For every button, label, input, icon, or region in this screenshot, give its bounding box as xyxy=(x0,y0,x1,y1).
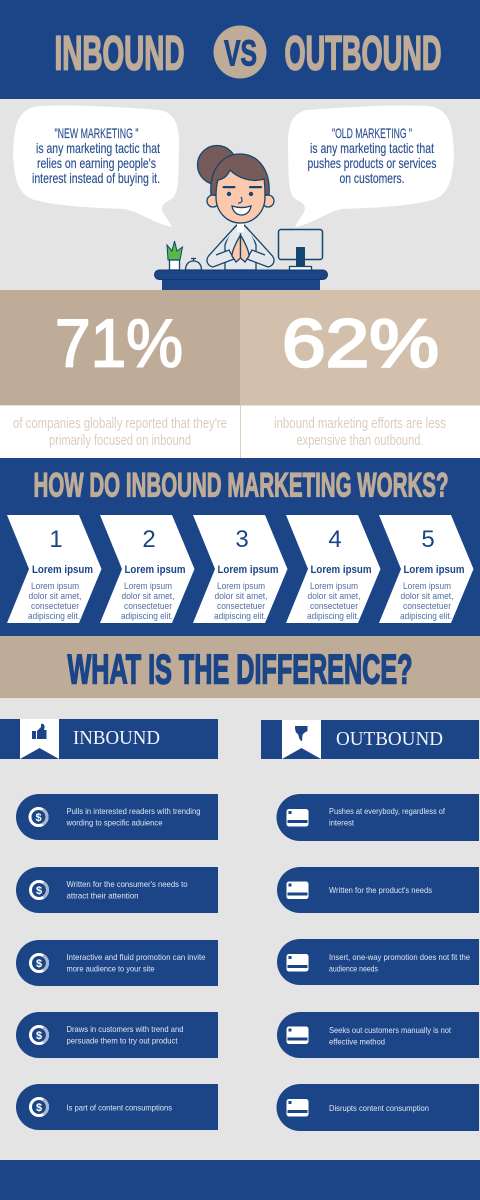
stat caption: 62%: expensive than outbound. xyxy=(296,433,424,449)
outbound row 2 xyxy=(277,867,479,913)
eyes and brows xyxy=(222,186,262,196)
inbound row 2: Written for the consumer's needs to xyxy=(66,879,188,889)
icon: coin xyxy=(30,882,48,898)
outbound row 1 xyxy=(276,794,479,841)
step 5 xyxy=(379,515,474,623)
speech bubble: old marketing: on customers. xyxy=(340,170,404,186)
icon: coin xyxy=(30,808,47,826)
step 2: adipiscing elit. xyxy=(121,611,173,621)
outbound row 4 xyxy=(277,1012,479,1058)
column header: inbound xyxy=(0,719,218,759)
inbound row 2 xyxy=(16,867,218,913)
inbound row 4 xyxy=(16,1012,218,1058)
stat caption: 71%: primarily focused on inbound xyxy=(49,433,191,449)
outbound row 4: effective method xyxy=(329,1036,385,1046)
step 3 xyxy=(193,515,288,623)
stat caption: 62% xyxy=(241,406,480,458)
step 3: consectetuer xyxy=(217,601,265,611)
outbound row 3 xyxy=(277,939,479,985)
step 5: 5 xyxy=(421,526,435,553)
step 2: consectetuer xyxy=(124,601,172,611)
torso xyxy=(225,225,256,270)
vs badge xyxy=(214,26,266,78)
step 4: Lorem ipsum xyxy=(310,564,372,576)
stat panel: 71% xyxy=(0,290,240,405)
inbound row 1: Pulls in interested readers with trending xyxy=(66,806,201,816)
step 3: 3 xyxy=(235,526,249,553)
stat panel: 62%: 62% xyxy=(282,306,439,382)
stat panel: 71%: 71% xyxy=(55,306,183,382)
step 2: Lorem ipsum xyxy=(124,564,186,576)
inbound row 3 xyxy=(16,940,218,986)
inbound row 3: more audience to your site xyxy=(66,964,155,974)
step 1: Lorem ipsum xyxy=(32,564,93,576)
inbound row 5: Is part of content consumptions xyxy=(66,1102,172,1112)
arms and hands xyxy=(207,224,274,267)
outbound row 5: Disrupts content consumption xyxy=(329,1103,429,1113)
ears xyxy=(207,195,274,207)
inbound row 1 xyxy=(16,794,218,840)
illustration: woman at desk xyxy=(154,146,328,290)
nose xyxy=(238,197,242,203)
section heading: what is the difference xyxy=(0,636,480,698)
desk xyxy=(154,270,328,290)
step 3: dolor sit amet, xyxy=(214,591,268,601)
speech bubble: new marketing: interest instead of buying it. xyxy=(32,170,160,186)
service bell xyxy=(186,258,202,270)
icon: coin: $ xyxy=(36,885,42,897)
step 1: adipiscing elit. xyxy=(28,611,80,621)
stat panel: 62% xyxy=(240,290,480,405)
step 4 xyxy=(286,515,380,623)
step 3: Lorem ipsum xyxy=(218,564,279,576)
icon: coin: $ xyxy=(36,1030,42,1042)
plant xyxy=(167,241,182,270)
icon: coin xyxy=(30,954,48,972)
face xyxy=(216,170,265,223)
step 5: Lorem ipsum xyxy=(404,564,465,576)
icon: card xyxy=(286,809,308,826)
inbound row 2: attract their attention xyxy=(66,890,139,900)
step 5: dolor sit amet, xyxy=(400,591,454,601)
icon: coin xyxy=(30,1098,48,1116)
step 4: consectetuer xyxy=(310,601,358,611)
hair back xyxy=(211,154,269,195)
computer monitor xyxy=(278,230,322,270)
footer band xyxy=(0,1160,480,1200)
column header: outbound: OUTBOUND xyxy=(336,728,443,750)
step 5: Lorem ipsum xyxy=(403,581,451,591)
column header: outbound xyxy=(261,720,479,759)
inbound row 1: wording to specific aduience xyxy=(66,818,163,828)
step 5: consectetuer xyxy=(403,601,451,611)
step 5: adipiscing elit. xyxy=(400,611,452,621)
step 4: 4 xyxy=(328,526,342,553)
inbound row 5 xyxy=(16,1084,218,1130)
speech bubble: new marketing: "NEW MARKETING " xyxy=(54,125,139,141)
step 1 xyxy=(7,515,102,623)
step 1: Lorem ipsum xyxy=(31,581,79,591)
speech bubble: new marketing: relies on earning people's xyxy=(37,155,156,171)
icon: card xyxy=(286,882,308,899)
icon: thumbs up xyxy=(32,724,46,739)
icon: coin: $ xyxy=(36,958,42,970)
header banner xyxy=(0,0,480,99)
step 3: Lorem ipsum xyxy=(217,581,265,591)
step 1: dolor sit amet, xyxy=(28,591,82,601)
hair bun xyxy=(198,146,236,184)
step 2: dolor sit amet, xyxy=(122,591,174,601)
step 1: consectetuer xyxy=(31,601,79,611)
column header: inbound: INBOUND xyxy=(73,727,160,749)
outbound row 2: Written for the product's needs xyxy=(329,885,432,895)
outbound row 4: Seeks out customers manually is not xyxy=(329,1025,452,1035)
vs badge: VS xyxy=(224,32,257,74)
icon: coin: $ xyxy=(36,1102,42,1114)
step 4: adipiscing elit. xyxy=(307,611,359,621)
stat caption: 71%: of companies globally reported that they're xyxy=(13,416,227,432)
inbound row 4: persuade them to try out product xyxy=(66,1036,178,1046)
icon: card xyxy=(286,1099,308,1116)
icon: card xyxy=(286,954,308,972)
smile xyxy=(232,206,251,215)
icon: thumbs down xyxy=(295,726,308,741)
step 4: dolor sit amet, xyxy=(308,591,360,601)
outbound row 1: Pushes at everybody, regardless of xyxy=(329,806,446,816)
section: how inbound marketing works xyxy=(0,458,480,636)
outbound row 5 xyxy=(276,1084,479,1131)
step 3: adipiscing elit. xyxy=(214,611,266,621)
speech bubble: old marketing xyxy=(288,105,454,227)
outbound row 3: audience needs xyxy=(329,964,378,974)
stat caption: 71% xyxy=(0,406,240,458)
step 4: Lorem ipsum xyxy=(310,581,358,591)
inbound row 3: Interactive and fluid promotion can invite xyxy=(66,952,206,962)
speech bubble: new marketing: is any marketing tactic that xyxy=(36,140,160,156)
icon: coin xyxy=(30,1026,48,1044)
icon: coin: $ xyxy=(35,812,42,824)
icon: card xyxy=(286,1026,308,1044)
title: inbound: INBOUND xyxy=(54,28,184,80)
step 2 xyxy=(100,515,194,623)
speech bubble: old marketing: "OLD MARKETING " xyxy=(332,125,412,141)
inbound row 4: Draws in customers with trend and xyxy=(66,1024,184,1034)
speech bubble: old marketing: pushes products or services xyxy=(308,155,436,171)
outbound row 1: interest xyxy=(329,818,355,828)
step 1: 1 xyxy=(49,526,63,553)
speech bubble: old marketing: is any marketing tactic that xyxy=(310,140,434,156)
step 2: Lorem ipsum xyxy=(124,581,172,591)
step 2: 2 xyxy=(142,526,156,553)
speech bubble: new marketing xyxy=(13,105,179,227)
